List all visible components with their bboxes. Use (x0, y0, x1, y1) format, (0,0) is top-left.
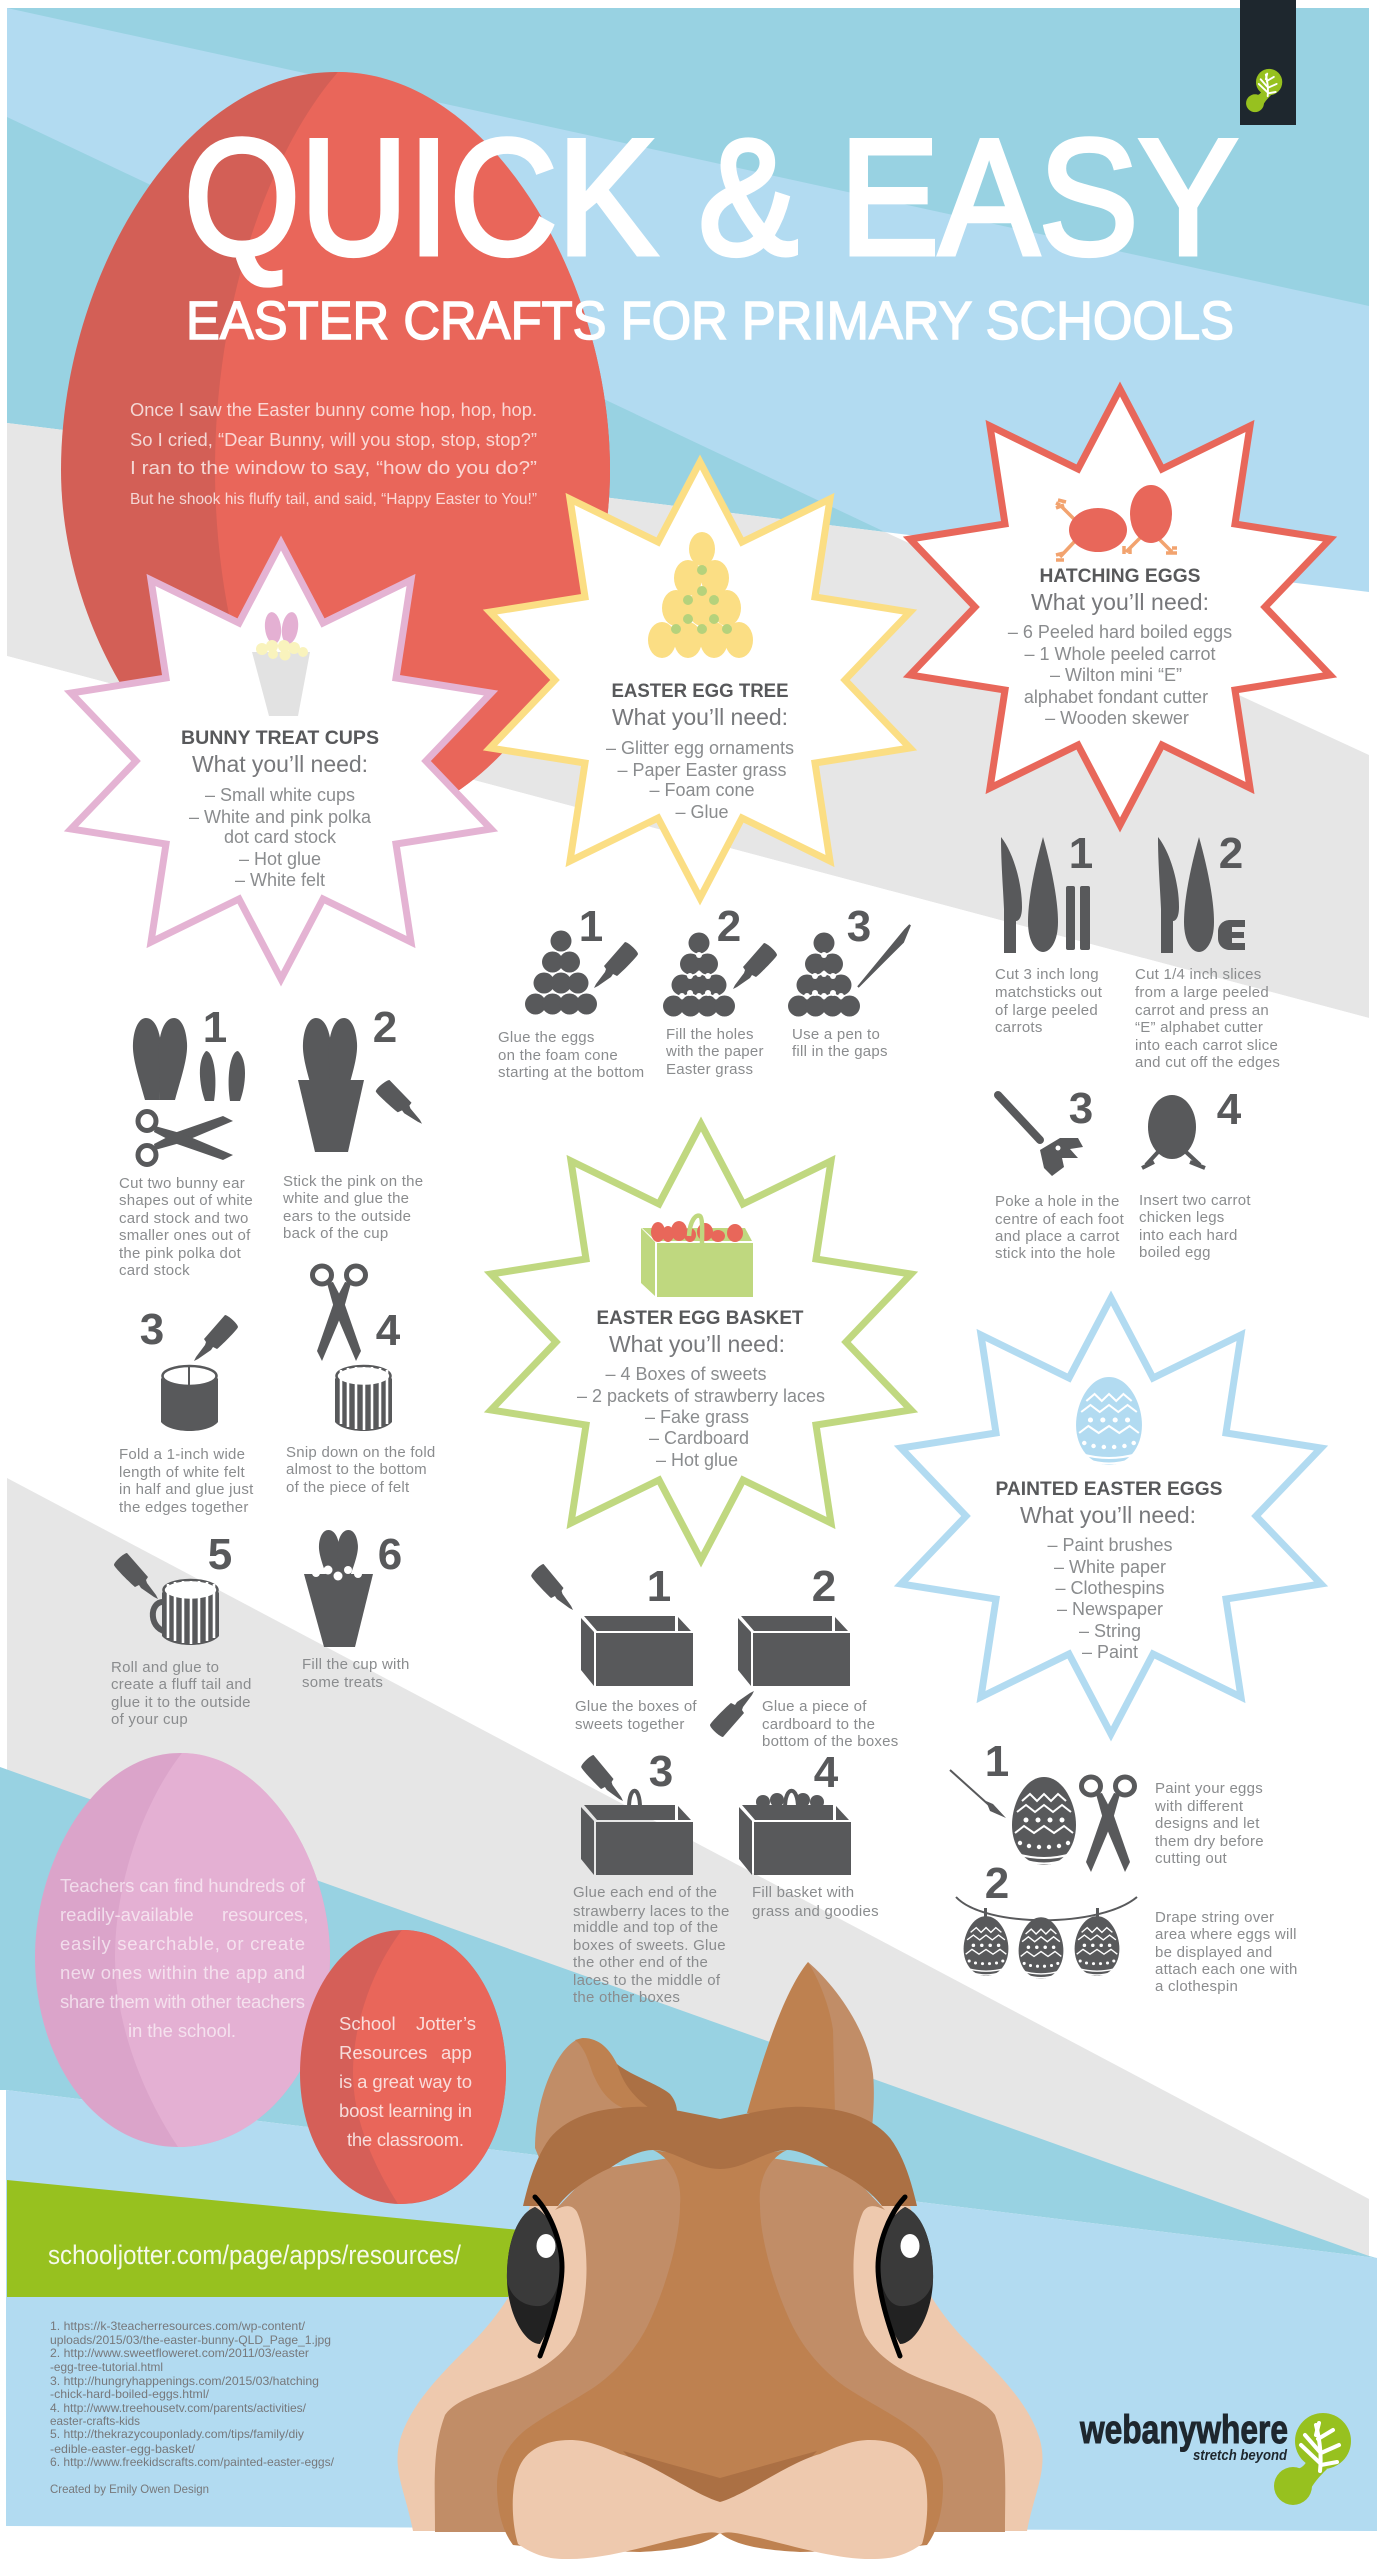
citations: 4. http://www.treehousetv.com/parents/activities/ (50, 2401, 307, 2415)
step 1: Glue the boxes of (575, 1698, 697, 1715)
step 1: of large peeled (995, 1002, 1098, 1019)
steps: easter egg basket (531, 1562, 898, 2006)
step 6: 6 (378, 1530, 402, 1579)
step 1: starting at the bottom (498, 1064, 644, 1081)
subtitle: EASTER CRAFTS FOR PRIMARY SCHOOLS (186, 291, 1234, 351)
step 2: carrot and press an (1135, 1002, 1269, 1019)
materials list: – Clothespins (1055, 1578, 1165, 1598)
step 2: bottom of the boxes (762, 1733, 898, 1750)
step 1 (995, 829, 1103, 1036)
step 3 (788, 902, 910, 1060)
step 2: white and glue the (282, 1190, 409, 1207)
citations: -egg-tree-tutorial.html (50, 2360, 163, 2374)
panel: bunny treat cups (71, 543, 491, 979)
step 1: 1 (1069, 829, 1093, 878)
icon: basket (641, 1216, 753, 1297)
materials list: – Glue (675, 802, 729, 822)
step 4: almost to the bottom (286, 1461, 427, 1478)
red egg callout: Jotter’s (416, 2013, 476, 2034)
large red egg with poem (61, 72, 610, 830)
pink egg callout: resources, (222, 1904, 308, 1925)
materials list: – Paper Easter grass (617, 760, 787, 780)
step 5: glue it to the outside (111, 1694, 251, 1711)
materials list (606, 738, 794, 822)
step 3: length of white felt (119, 1464, 245, 1481)
background: lower dark blue band (0, 1767, 1377, 2258)
step 4: 4 (376, 1306, 401, 1355)
red egg callout: Resources (339, 2042, 427, 2063)
materials list: – Foam cone (649, 780, 755, 800)
steps: bunny treat cups (111, 1003, 436, 1728)
step 3: the edges together (119, 1499, 249, 1516)
heading: HATCHING EGGS (1040, 566, 1200, 587)
step 3 (573, 1747, 730, 2006)
step 5: create a fluff tail and (111, 1676, 252, 1693)
materials list (577, 1364, 825, 1470)
heading: EASTER EGG TREE (612, 681, 788, 702)
step 1 (119, 1003, 253, 1279)
pink egg callout: Teachers can find hundreds of (60, 1875, 306, 1896)
step 3 (995, 1084, 1125, 1262)
step 5: 5 (208, 1530, 232, 1579)
step 4 (1139, 1085, 1251, 1261)
webanywhere logo: stretch beyond (1193, 2447, 1288, 2464)
step 3: 3 (140, 1305, 164, 1354)
materials list: – White paper (1054, 1557, 1166, 1577)
poem: I ran to the window to say, “how do you do?” (130, 458, 537, 478)
citations: 6. http://www.freekidscrafts.com/painted-easter-eggs/ (50, 2455, 335, 2469)
panel: easter egg tree (490, 462, 910, 898)
step 1: 1 (985, 1737, 1009, 1786)
step 2 (710, 1562, 898, 1750)
ears (535, 1962, 874, 2165)
step 1: shapes out of white (119, 1192, 253, 1209)
step 3: and place a carrot (995, 1228, 1120, 1245)
step 2: “E” alphabet cutter (1135, 1019, 1263, 1036)
poem: But he shook his fluffy tail, and said, “Happy Easter to You!” (130, 491, 537, 508)
webanywhere logo: webanywhere (1079, 2408, 1288, 2452)
materials list: – Wooden skewer (1045, 708, 1189, 728)
materials list: – Paint (1082, 1642, 1138, 1662)
pink egg callout (35, 1753, 330, 2147)
face left half (397, 2107, 720, 2559)
step 3: stick into the hole (995, 1245, 1116, 1262)
step 3: laces to the middle of (573, 1972, 721, 1989)
materials list (1008, 622, 1232, 728)
what you'll need: What you’ll need: (192, 751, 368, 777)
pink egg callout: new ones within the app and (60, 1962, 305, 1983)
bunny face (397, 1962, 1043, 2559)
background: lower grey band (7, 1478, 1369, 2258)
what you'll need: What you’ll need: (1031, 589, 1209, 615)
step 2: back of the cup (283, 1225, 388, 1242)
step 1: Paint your eggs (1155, 1780, 1263, 1797)
step 2 (956, 1859, 1298, 1995)
materials list: – Glitter egg ornaments (606, 738, 794, 758)
step 2 (1135, 829, 1280, 1071)
steps: painted easter eggs (950, 1737, 1298, 1995)
step 2: attach each one with (1155, 1961, 1298, 1978)
step 1: on the foam cone (498, 1047, 618, 1064)
step 4: Fill basket with (752, 1884, 854, 1901)
step 6: some treats (302, 1674, 383, 1691)
red egg callout: is a great way to (339, 2071, 472, 2092)
poem (130, 400, 537, 508)
citations: 3. http://hungryhappenings.com/2015/03/hatching (50, 2374, 319, 2388)
step 3: Use a pen to (792, 1026, 880, 1043)
citations: 5. http://thekrazycouponlady.com/tips/family/diy (50, 2427, 304, 2441)
icon: egg tree (648, 532, 753, 658)
step 2: and cut off the edges (1135, 1054, 1280, 1071)
green URL banner: schooljotter.com/page/apps/resources/ (48, 2240, 461, 2270)
citations: uploads/2015/03/the-easter-bunny-QLD_Page_1.jpg (50, 2333, 331, 2347)
red egg callout (300, 1930, 506, 2204)
red egg callout: boost learning in (339, 2100, 472, 2121)
materials list: – 4 Boxes of sweets (605, 1364, 767, 1384)
background: lower light blue field (6, 2090, 1377, 2531)
background: top light blue field (7, 8, 1369, 808)
materials list: – Paint brushes (1047, 1535, 1173, 1555)
step 2: 2 (717, 902, 741, 951)
step 2: 2 (1219, 829, 1243, 878)
step 1: sweets together (575, 1716, 685, 1733)
materials list: – Cardboard (649, 1428, 749, 1448)
icon: decorated egg (1076, 1377, 1142, 1465)
step 3: fill in the gaps (792, 1043, 888, 1060)
step 2: a clothespin (1155, 1978, 1238, 1995)
poem: Once I saw the Easter bunny come hop, hop, hop. (130, 400, 537, 420)
materials list: – 2 packets of strawberry laces (577, 1386, 825, 1406)
panel: hatching eggs (910, 389, 1330, 825)
materials list: – 6 Peeled hard boiled eggs (1008, 622, 1232, 642)
materials list: – Fake grass (645, 1407, 749, 1427)
materials list: – Newspaper (1057, 1599, 1163, 1619)
panel: easter egg basket (491, 1124, 911, 1560)
step 4: chicken legs (1139, 1209, 1225, 1226)
step 3: 3 (649, 1747, 673, 1796)
step 3: 3 (1069, 1084, 1093, 1133)
step 3 (119, 1305, 254, 1516)
step 1: 1 (203, 1003, 227, 1052)
step 1: with different (1154, 1798, 1244, 1815)
step 2: from a large peeled (1135, 984, 1269, 1001)
step 1: Cut 3 inch long (995, 966, 1099, 983)
step 3: centre of each foot (995, 1211, 1125, 1228)
step 5 (111, 1530, 252, 1728)
materials list: – White and pink polka (189, 807, 372, 827)
step 4: 4 (1217, 1085, 1242, 1134)
step 4 (286, 1266, 436, 1496)
step 3: the other end of the (573, 1954, 708, 1971)
citations: 1. https://k-3teacherresources.com/wp-content/ (50, 2319, 306, 2333)
face right half (720, 2107, 1043, 2559)
materials list: – Hot glue (239, 849, 321, 869)
what you'll need: What you’ll need: (612, 704, 788, 730)
eye highlights (536, 2234, 920, 2258)
step 2: 2 (985, 1859, 1009, 1908)
step 3: Glue each end of the (573, 1884, 717, 1901)
step 2: cardboard to the (762, 1716, 875, 1733)
step 3: Fold a 1-inch wide (119, 1446, 245, 1463)
step 1 (950, 1737, 1264, 1872)
step 1: card stock (119, 1262, 190, 1279)
step 4: boiled egg (1139, 1244, 1211, 1261)
step 1: 1 (647, 1562, 671, 1611)
materials list: dot card stock (224, 827, 337, 847)
step 1: matchsticks out (995, 984, 1103, 1001)
step 2 (282, 1003, 423, 1242)
step 3: boxes of sweets. Glue (573, 1937, 726, 1954)
step 1 (498, 902, 644, 1081)
step 1: designs and let (1155, 1815, 1260, 1832)
materials list (1047, 1535, 1173, 1662)
citations: easter-crafts-kids (50, 2414, 140, 2428)
step 2: into each carrot slice (1135, 1037, 1278, 1054)
materials list (189, 785, 372, 890)
pink egg callout: share them with other teachers (60, 1991, 305, 2012)
pink egg callout: readily-available (60, 1904, 194, 1925)
step 4: grass and goodies (752, 1903, 879, 1920)
step 3: the other boxes (573, 1989, 680, 2006)
steps: hatching eggs (995, 829, 1280, 1262)
step 2: area where eggs will (1155, 1926, 1297, 1943)
steps: easter egg tree (498, 902, 910, 1081)
citations: 2. http://www.sweetfloweret.com/2011/03/easter (50, 2346, 309, 2360)
step 4: into each hard (1139, 1227, 1238, 1244)
bookmark tab with logo (1240, 0, 1296, 125)
step 3: in half and glue just (119, 1481, 254, 1498)
citations: -edible-easter-egg-basket/ (50, 2442, 196, 2456)
step 5: Roll and glue to (111, 1659, 219, 1676)
pink egg callout: in the school. (128, 2020, 236, 2041)
materials list: – Small white cups (205, 785, 355, 805)
step 2: Easter grass (666, 1061, 753, 1078)
step 1 (531, 1562, 697, 1733)
step 4: Insert two carrot (1139, 1192, 1251, 1209)
heading: EASTER EGG BASKET (596, 1308, 804, 1329)
panel: painted easter eggs (901, 1298, 1321, 1734)
main title: QUICK & EASY (184, 105, 1238, 289)
step 4: 4 (814, 1748, 839, 1797)
poem: So I cried, “Dear Bunny, will you stop, stop, stop?” (130, 430, 537, 450)
step 2: 2 (373, 1003, 397, 1052)
webanywhere logo (1079, 2408, 1351, 2505)
step 1: smaller ones out of (119, 1227, 251, 1244)
citations: -chick-hard-boiled-eggs.html/ (50, 2387, 210, 2401)
red egg callout: the classroom. (347, 2129, 464, 2150)
citations: Created by Emily Owen Design (50, 2482, 209, 2496)
step 3: strawberry laces to the (573, 1903, 730, 1920)
step 6: Fill the cup with (302, 1656, 410, 1673)
icon: hatching eggs (1056, 485, 1177, 560)
heading: PAINTED EASTER EGGS (996, 1479, 1222, 1500)
step 2: Stick the pink on the (283, 1173, 423, 1190)
step 2: with the paper (665, 1043, 764, 1060)
step 3: 3 (847, 902, 871, 951)
what you'll need: What you’ll need: (609, 1331, 785, 1357)
step 1: Cut two bunny ear (119, 1175, 245, 1192)
icon: bunny cup (252, 611, 310, 716)
step 1: cutting out (1155, 1850, 1228, 1867)
step 1: the pink polka dot (119, 1245, 242, 1262)
step 3: middle and top of the (573, 1919, 718, 1936)
step 4: Snip down on the fold (286, 1444, 436, 1461)
step 1: carrots (995, 1019, 1043, 1036)
pink egg callout: easily searchable, or create (60, 1933, 305, 1954)
materials list: – White felt (235, 870, 325, 890)
step 2: ears to the outside (283, 1208, 411, 1225)
step 5: of your cup (111, 1711, 188, 1728)
materials list: – Hot glue (656, 1450, 738, 1470)
green URL banner (7, 2180, 560, 2297)
step 4 (739, 1748, 879, 1920)
step 2: be displayed and (1155, 1944, 1272, 1961)
heading: BUNNY TREAT CUPS (181, 728, 379, 749)
step 2: Glue a piece of (762, 1698, 867, 1715)
step 2: Cut 1/4 inch slices (1135, 966, 1261, 983)
what you'll need: What you’ll need: (1020, 1502, 1196, 1528)
step 2: 2 (812, 1562, 836, 1611)
step 1: 1 (579, 902, 603, 951)
red egg callout: School (339, 2013, 396, 2034)
step 3: Poke a hole in the (995, 1193, 1120, 1210)
step 1: them dry before (1155, 1833, 1264, 1850)
red egg callout: app (441, 2042, 472, 2063)
step 2 (663, 902, 777, 1078)
materials list: alphabet fondant cutter (1024, 687, 1208, 707)
step 6 (302, 1530, 410, 1691)
materials list: – String (1079, 1621, 1141, 1641)
materials list: – 1 Whole peeled carrot (1024, 644, 1216, 664)
step 1: card stock and two (119, 1210, 249, 1227)
step 4: of the piece of felt (286, 1479, 410, 1496)
step 2: Drape string over (1155, 1909, 1274, 1926)
background: grey and white diagonal bands (7, 423, 1369, 1200)
materials list: – Wilton mini “E” (1050, 665, 1182, 685)
step 1: Glue the eggs (498, 1029, 595, 1046)
step 2: Fill the holes (666, 1026, 754, 1043)
citations (50, 2319, 335, 2496)
